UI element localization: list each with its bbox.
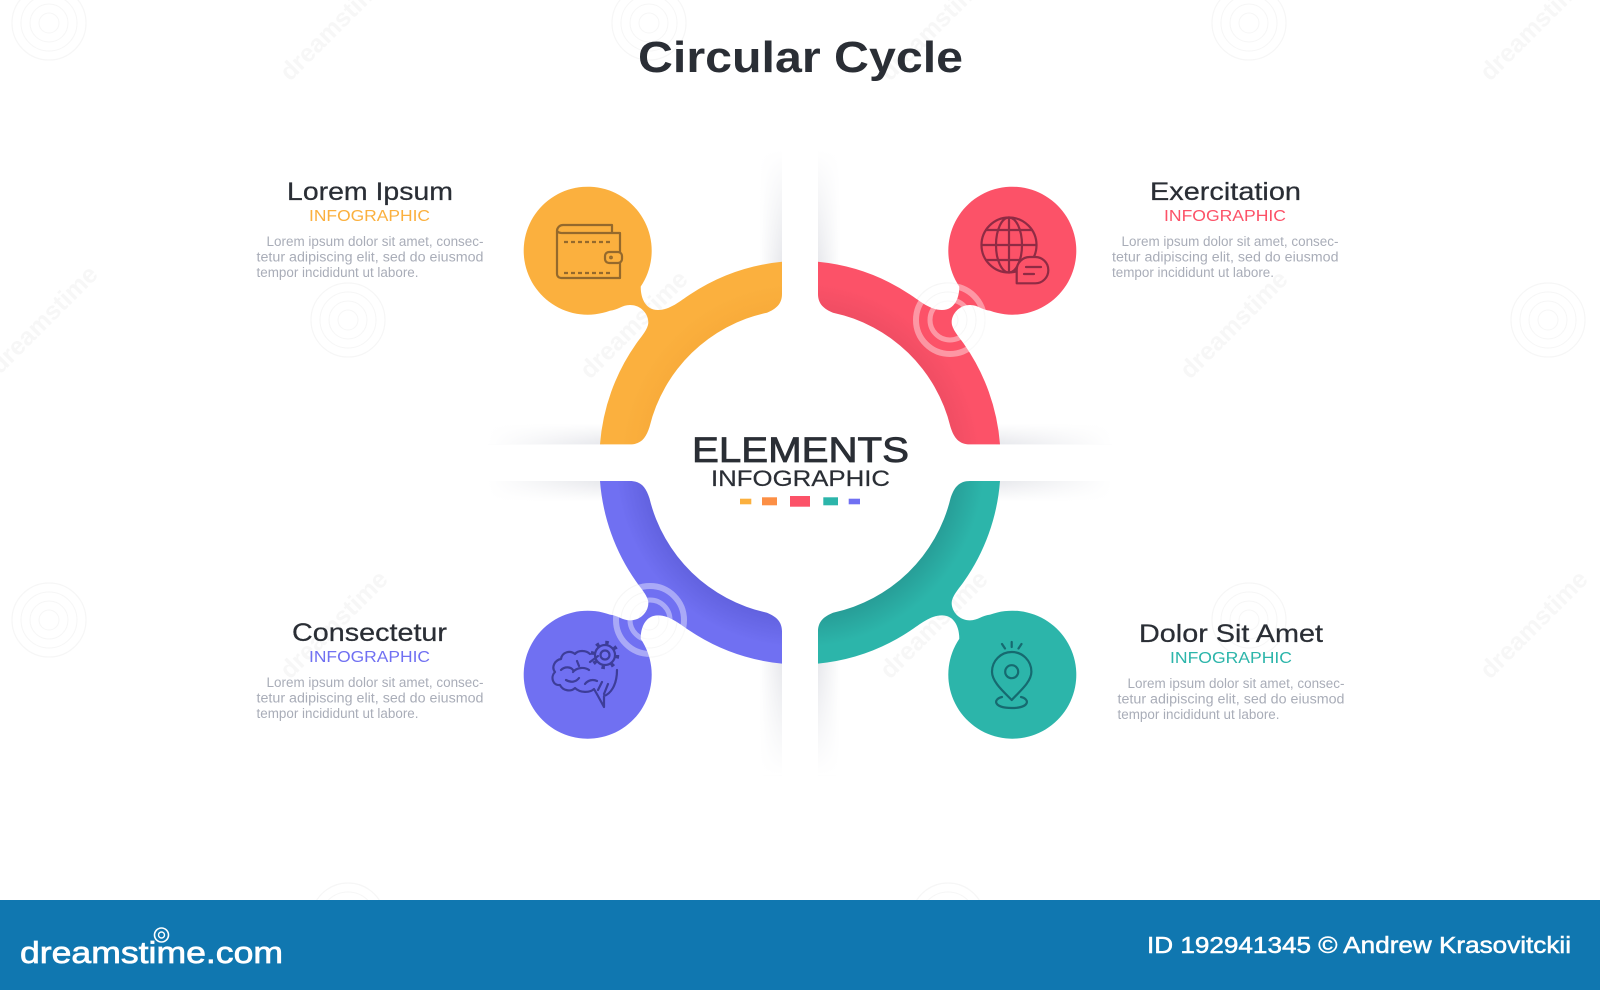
text block: lorem ipsum: tempor incididunt ut labore. — [256, 265, 418, 280]
text block: exercitation: tetur adipiscing elit, sed do eiusmod — [1112, 250, 1338, 264]
text block: exercitation — [1112, 178, 1338, 280]
text block: lorem ipsum — [256, 178, 484, 280]
text block: dolor sit amet — [1118, 620, 1344, 722]
text block: lorem ipsum: Lorem ipsum dolor sit amet, consec- — [266, 234, 484, 249]
text block: consectetur: INFOGRAPHIC — [309, 649, 430, 666]
segment: teal arc with circle — [818, 481, 1076, 739]
background watermark: dreamstime — [1174, 265, 1294, 384]
icon: wallet — [557, 225, 622, 278]
text block: consectetur: Lorem ipsum dolor sit amet, consec- — [266, 675, 484, 690]
background watermark: dreamstime — [274, 565, 394, 684]
text block: exercitation: Lorem ipsum dolor sit amet, consec- — [1122, 234, 1338, 249]
segment: purple arc with circle — [524, 481, 782, 739]
icon: brain with gear — [553, 642, 618, 707]
watermark rings over segments — [616, 286, 984, 654]
title: Circular Cycle — [638, 33, 963, 82]
icon: globe with speech bubble — [982, 218, 1048, 283]
text block: lorem ipsum: tetur adipiscing elit, sed do eiusmod — [256, 250, 484, 264]
text block: exercitation: INFOGRAPHIC — [1164, 208, 1286, 225]
center label — [692, 431, 909, 507]
text block: dolor sit amet: INFOGRAPHIC — [1170, 650, 1292, 667]
colour dashes — [740, 496, 860, 507]
center heading: elements: ELEMENTS — [692, 431, 909, 470]
panel shadows — [488, 150, 1112, 775]
text block: dolor sit amet: tetur adipiscing elit, sed do eiusmod — [1118, 692, 1344, 706]
background watermark: dreamstime — [1474, 565, 1594, 684]
text block: lorem ipsum: Lorem Ipsum — [287, 178, 453, 206]
footer logo: dreamstime.com — [20, 935, 283, 970]
text block: exercitation: Exercitation — [1150, 178, 1301, 206]
background watermark: dreamstime — [574, 265, 694, 384]
center subheading: infographic: INFOGRAPHIC — [711, 466, 890, 491]
icon: map pin — [992, 642, 1031, 708]
text block: lorem ipsum: INFOGRAPHIC — [309, 208, 430, 225]
text block: dolor sit amet: Dolor Sit Amet — [1139, 620, 1323, 648]
footer bar — [0, 900, 1600, 990]
text block: consectetur: tetur adipiscing elit, sed do eiusmod — [256, 690, 484, 706]
background watermark: dreamstime — [874, 565, 994, 684]
footer credit: ID 192941345 © Andrew Krasovitckii — [1147, 932, 1571, 958]
segment: yellow arc with circle — [524, 187, 782, 444]
segment: red arc with circle — [818, 187, 1076, 444]
text block: dolor sit amet: Lorem ipsum dolor sit amet, consec- — [1128, 676, 1344, 691]
text block: consectetur: Consectetur — [292, 619, 447, 647]
text block: consectetur: tempor incididunt ut labore. — [256, 706, 418, 721]
text block: consectetur — [256, 619, 484, 721]
text block: dolor sit amet: tempor incididunt ut labore. — [1118, 707, 1280, 722]
text block: exercitation: tempor incididunt ut labore. — [1112, 265, 1274, 280]
